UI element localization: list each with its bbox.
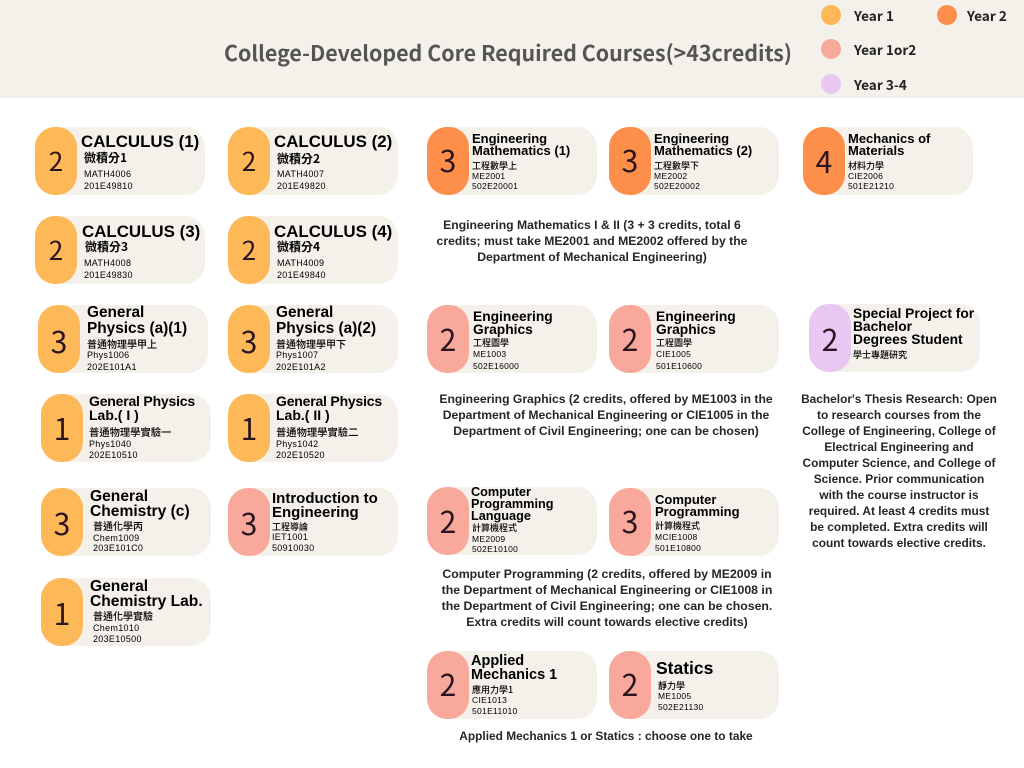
card: General Physics 1: 3	[51, 318, 67, 362]
note: thesis research	[801, 392, 997, 550]
card: Engineering Mathematics 2: 工程數學下	[654, 159, 699, 172]
legend: year 1 or 2 label: Year 1or2	[854, 39, 916, 59]
card: Engineering Mathematics 1: Mathematics (1)	[472, 143, 570, 158]
card: Special Project: Degrees Student	[853, 332, 963, 347]
card: Engineering Graphics ME: ME1003	[473, 349, 506, 359]
card: General Chemistry: Chem1009	[93, 533, 139, 543]
legend	[821, 5, 1007, 94]
card: General Chemistry: 普通化學丙	[93, 518, 143, 533]
note: computer programming: the Department of Mechanical Engineering or CIE1008 in	[442, 583, 772, 597]
card: Introduction to Engineering: Introduction to	[272, 490, 378, 507]
card: General Physics 2	[228, 305, 398, 373]
card: Calculus 1: 2	[49, 142, 63, 179]
card: General Chemistry Lab: 203E10500	[93, 634, 142, 644]
card: Engineering Mathematics 1	[427, 127, 597, 195]
card: Engineering Graphics CIE	[609, 305, 779, 373]
card: General Physics 1: General	[87, 304, 144, 321]
card: Engineering Mathematics 1: 3	[440, 137, 456, 181]
card: Applied Mechanics 1: Applied	[471, 653, 524, 669]
legend: year 1 label: Year 1	[854, 5, 894, 25]
card: Engineering Graphics ME: 工程圖學	[473, 336, 509, 349]
legend: year 3-4 swatch	[821, 74, 841, 94]
card: Mechanics of Materials: 4	[816, 138, 832, 182]
card: Engineering Graphics ME: 502E16000	[473, 361, 519, 371]
card: Calculus 2	[228, 127, 398, 195]
legend: year 2 label: Year 2	[967, 5, 1007, 25]
card: Calculus 4: MATH4009	[277, 258, 324, 268]
card: General Chemistry Lab	[41, 578, 211, 646]
card: Applied Mechanics 1: 501E11010	[472, 706, 518, 716]
card: Engineering Mathematics 2: ME2002	[654, 171, 687, 181]
card: General Physics Lab 2: Phys1042	[276, 439, 318, 449]
card: Special Project: Bachelor	[853, 319, 912, 334]
card: Statics: Statics	[656, 658, 713, 678]
card: Calculus 2: 2	[242, 142, 256, 179]
card: Calculus 3	[35, 216, 205, 284]
card: Introduction to Engineering	[228, 488, 398, 556]
note: thesis research: be completed. Extra credits will	[810, 520, 988, 534]
card: Computer Programming Language	[427, 487, 597, 555]
card: Engineering Mathematics 1: ME2001	[472, 171, 505, 181]
card: General Physics 1: Physics (a)(1)	[87, 320, 187, 337]
note: computer programming	[442, 567, 772, 629]
note: thesis research: with the course instructor is	[819, 488, 979, 502]
card: Calculus 2: CALCULUS (2)	[274, 132, 392, 151]
note: thesis research: count towards elective credits.	[812, 536, 986, 550]
card: Computer Programming Language: 502E10100	[472, 544, 518, 554]
card: Engineering Graphics ME: Engineering	[473, 309, 553, 324]
note: computer programming: Computer Programming (2 credits, offered by ME2009 in	[442, 567, 772, 581]
card: Computer Programming Language: Programming	[471, 497, 553, 511]
card: Introduction to Engineering: IET1001	[272, 532, 308, 542]
card: Calculus 2: 201E49820	[277, 181, 326, 191]
note: engineering mathematics: Engineering Mathematics I & II (3 + 3 credits, total 6	[443, 218, 741, 232]
card: Calculus 4: 微積分4	[277, 238, 320, 255]
card: Mechanics of Materials: 材料力學	[848, 159, 884, 172]
card: General Physics 2: Phys1007	[276, 350, 318, 360]
card: Applied Mechanics 1: CIE1013	[472, 695, 507, 705]
note: thesis research: to research courses from the	[817, 408, 981, 422]
card: General Physics Lab 1: 202E10510	[89, 450, 138, 460]
card: Engineering Graphics CIE: CIE1005	[656, 349, 691, 359]
note: thesis research: Science. Prior communication	[814, 472, 984, 486]
card: General Physics 1: 普通物理學甲上	[87, 336, 157, 351]
card: General Physics Lab 2: General Physics	[276, 393, 382, 409]
card: Calculus 1	[35, 127, 205, 195]
card: Computer Programming	[609, 488, 779, 556]
card: Statics	[609, 651, 779, 719]
card: Computer Programming: Computer	[655, 492, 716, 507]
card: Engineering Mathematics 1: Engineering	[472, 131, 547, 146]
card: Statics: 靜力學	[658, 679, 685, 692]
card: Special Project: 2	[822, 316, 838, 360]
card: Calculus 4: 201E49840	[277, 270, 326, 280]
card: Computer Programming Language: ME2009	[472, 534, 505, 544]
note: engineering graphics: Department of Civil Engineering; one can be chosen)	[453, 424, 759, 438]
card: General Physics Lab 2: 普通物理學實驗二	[276, 424, 358, 439]
note: thesis research: Electrical Engineering and	[824, 440, 974, 454]
card: Engineering Graphics ME	[427, 305, 597, 373]
card: General Physics Lab 2	[228, 394, 398, 462]
card: Applied Mechanics 1: 2	[440, 661, 456, 705]
card: General Chemistry Lab: General	[90, 578, 148, 595]
card: Computer Programming Language: Language	[471, 509, 531, 523]
card: Calculus 1: 201E49810	[84, 181, 133, 191]
card: General Physics Lab 2: 202E10520	[276, 450, 325, 460]
card: Statics: ME1005	[658, 691, 691, 701]
card: Calculus 3: 201E49830	[84, 270, 133, 280]
card: Introduction to Engineering: 3	[241, 500, 257, 544]
card: Applied Mechanics 1	[427, 651, 597, 719]
note: engineering graphics: Engineering Graphics (2 credits, offered by ME1003 in the	[439, 392, 773, 406]
card: General Physics Lab 2: Lab.( II )	[276, 407, 330, 423]
legend: year 1 swatch	[821, 5, 841, 25]
card: Introduction to Engineering: 工程導論	[272, 520, 308, 533]
card: Computer Programming Language: 計算機程式	[472, 521, 517, 534]
card: General Chemistry: 3	[54, 500, 70, 544]
note: engineering mathematics: Department of Mechanical Engineering)	[477, 250, 707, 264]
card: Mechanics of Materials: Mechanics of	[848, 131, 930, 146]
legend: year 2 swatch	[937, 5, 957, 25]
card: General Physics 1	[38, 305, 208, 373]
card: Engineering Mathematics 2: 502E20002	[654, 181, 700, 191]
card: Special Project: Special Project for	[853, 306, 974, 321]
card: Computer Programming: 501E10800	[655, 543, 701, 553]
card: Engineering Graphics CIE: Engineering	[656, 309, 736, 324]
card: General Physics 2: General	[276, 304, 333, 321]
card: General Physics 2: 202E101A2	[276, 362, 326, 372]
card: Computer Programming Language: Computer	[471, 485, 531, 499]
card: Engineering Graphics CIE: 501E10600	[656, 361, 702, 371]
card: Special Project	[809, 304, 980, 372]
card: Mechanics of Materials: 501E21210	[848, 181, 894, 191]
card: Mechanics of Materials	[803, 127, 973, 195]
card: Computer Programming: Programming	[655, 504, 740, 519]
note: engineering mathematics	[437, 218, 747, 264]
card: Calculus 4: 2	[242, 231, 256, 268]
note: thesis research: College of Engineering, College of	[802, 424, 996, 438]
card: General Physics Lab 1: Phys1040	[89, 439, 131, 449]
legend: year 3-4 label: Year 3-4	[854, 74, 907, 94]
card: General Chemistry: Chemistry (c)	[90, 503, 190, 520]
card: Introduction to Engineering: 50910030	[272, 543, 314, 553]
card: Calculus 2: MATH4007	[277, 169, 324, 179]
card: Calculus 1: CALCULUS (1)	[81, 132, 199, 151]
card: Engineering Graphics ME: 2	[440, 316, 456, 360]
card: Engineering Graphics CIE: Graphics	[656, 322, 716, 337]
card: Mechanics of Materials: Materials	[848, 143, 904, 158]
card: Engineering Mathematics 2	[609, 127, 779, 195]
card: Engineering Mathematics 1: 工程數學上	[472, 159, 517, 172]
card: Mechanics of Materials: CIE2006	[848, 171, 883, 181]
card: Engineering Graphics CIE: 工程圖學	[656, 336, 692, 349]
card: General Physics 2: Physics (a)(2)	[276, 320, 376, 337]
note: thesis research: required. At least 4 credits must	[809, 504, 989, 518]
card: Calculus 3: CALCULUS (3)	[82, 222, 200, 241]
note: engineering graphics	[439, 392, 773, 438]
legend: year 1 or 2 swatch	[821, 39, 841, 59]
card: Calculus 1: 微積分1	[84, 149, 127, 166]
card: General Physics Lab 1: 普通物理學實驗一	[89, 424, 171, 439]
note: thesis research: Computer Science, and College of	[803, 456, 995, 470]
card: Introduction to Engineering: Engineering	[272, 504, 359, 521]
note: computer programming: Extra credits will count towards elective credits)	[466, 615, 748, 629]
note: thesis research: Bachelor's Thesis Research: Open	[801, 392, 997, 406]
card: Calculus 4	[228, 216, 398, 284]
card: Applied Mechanics 1: 應用力學1	[472, 683, 513, 696]
title: College-Developed Core Required Courses(>43credits)	[224, 37, 792, 68]
card: General Chemistry: General	[90, 488, 148, 505]
card: General Chemistry Lab: 普通化學實驗	[93, 608, 153, 623]
card: Applied Mechanics 1: Mechanics 1	[471, 667, 557, 683]
card: General Chemistry	[41, 488, 211, 556]
card: Engineering Mathematics 2: Engineering	[654, 131, 729, 146]
card: General Physics Lab 1: 1	[54, 405, 70, 449]
card: Calculus 4: CALCULUS (4)	[274, 222, 392, 241]
card: Computer Programming: 計算機程式	[655, 519, 700, 532]
card: General Chemistry Lab: 1	[54, 590, 70, 634]
note: engineering graphics: Department of Mechanical Engineering or CIE1005 in the	[443, 408, 769, 422]
note: engineering mathematics: credits; must take ME2001 and ME2002 offered by the	[437, 234, 747, 248]
card: Engineering Mathematics 1: 502E20001	[472, 181, 518, 191]
header band	[0, 0, 1024, 98]
card: General Physics 2: 普通物理學甲下	[276, 336, 346, 351]
card: General Physics Lab 1: General Physics	[89, 393, 195, 409]
card: Engineering Mathematics 2: Mathematics (2)	[654, 143, 752, 158]
card: General Chemistry Lab: Chemistry Lab.	[90, 593, 203, 610]
card: Engineering Mathematics 2: 3	[622, 137, 638, 181]
card: Engineering Graphics ME: Graphics	[473, 322, 533, 337]
card: General Physics Lab 1: Lab.( I )	[89, 407, 139, 423]
card: Computer Programming Language: 2	[440, 498, 456, 542]
card: General Chemistry: 203E101C0	[93, 543, 143, 553]
card: Computer Programming: MCIE1008	[655, 532, 698, 542]
card: Calculus 3: 微積分3	[85, 238, 128, 255]
card: General Physics 1: 202E101A1	[87, 362, 137, 372]
card: Calculus 3: 2	[49, 231, 63, 268]
card: General Physics Lab 1	[41, 394, 211, 462]
note: applied mechanics or statics: Applied Mechanics 1 or Statics : choose one to take	[459, 729, 753, 743]
note: computer programming: the Department of Civil Engineering; one can be chosen.	[442, 599, 772, 613]
card: General Physics 1: Phys1006	[87, 350, 129, 360]
card: Calculus 3: MATH4008	[84, 258, 131, 268]
card: General Physics Lab 2: 1	[241, 405, 257, 449]
card: Statics: 502E21130	[658, 702, 704, 712]
card: Statics: 2	[622, 661, 638, 705]
card: Engineering Graphics CIE: 2	[622, 316, 638, 360]
card: Computer Programming: 3	[622, 498, 638, 542]
card: General Chemistry Lab: Chem1010	[93, 623, 139, 633]
card: Calculus 1: MATH4006	[84, 169, 131, 179]
card: Calculus 2: 微積分2	[277, 150, 320, 167]
card: General Physics 2: 3	[241, 318, 257, 362]
card: Special Project: 學士專題研究	[853, 348, 907, 361]
